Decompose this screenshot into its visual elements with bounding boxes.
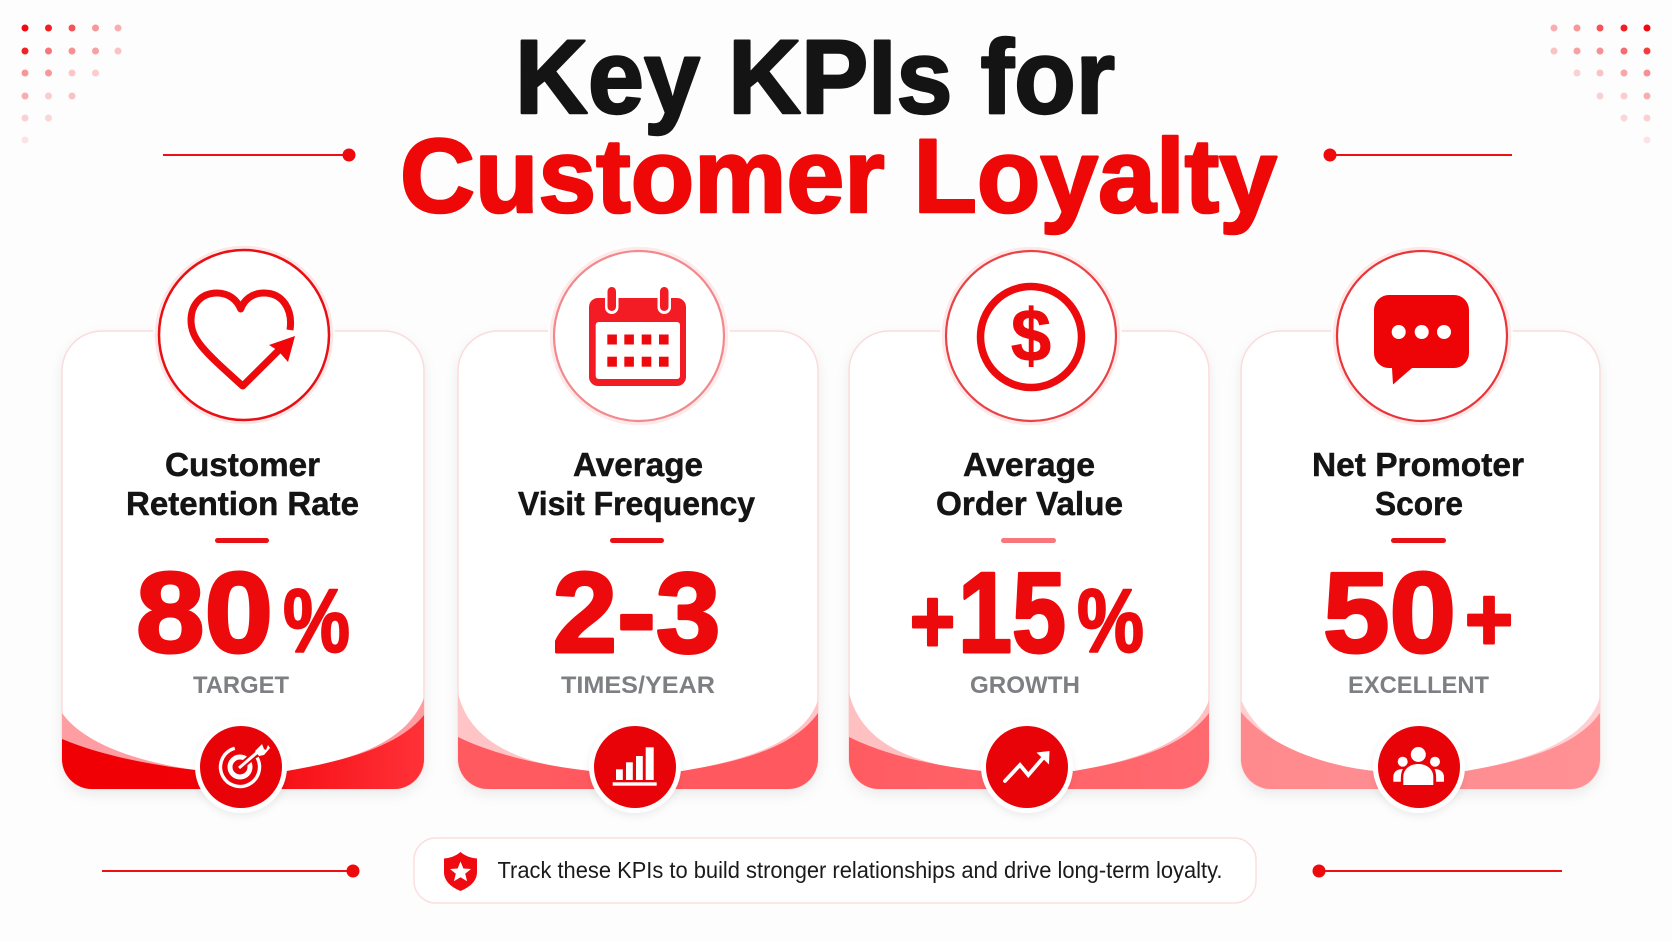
value: % (283, 572, 350, 672)
icon: target badge (195, 721, 287, 813)
value: + (1465, 570, 1513, 670)
message text: Track these KPIs to build stronger relationships and drive long-term loyalty. (498, 857, 1222, 883)
icon: shield with star (444, 852, 477, 891)
value: 50 (1323, 550, 1456, 677)
card title (126, 446, 359, 522)
icon: dollar coin (980, 286, 1082, 388)
bottom wave (458, 693, 818, 789)
bottom wave (1241, 697, 1600, 789)
value: % (1077, 572, 1144, 672)
icon: bar chart badge (589, 721, 681, 813)
bottom wave (849, 693, 1209, 789)
caption: GROWTH (970, 672, 1080, 699)
panel: net promoter score (1241, 245, 1600, 813)
card frame (1241, 331, 1600, 789)
divider (215, 538, 269, 543)
card title: Score (1375, 485, 1463, 522)
caption: TARGET (193, 672, 289, 699)
value: + (910, 572, 955, 672)
icon circle (1331, 245, 1513, 427)
title (400, 19, 1277, 235)
card title: Order Value (936, 485, 1123, 522)
callout box (414, 838, 1256, 903)
icon: dollar coin: $ (1011, 294, 1051, 377)
icon: heart with arrow (191, 293, 295, 386)
icon: people badge (1373, 721, 1465, 813)
decorative dots: top right (1550, 24, 1650, 144)
card frame (62, 331, 424, 789)
icon: chat bubble (1374, 295, 1469, 384)
card title (936, 446, 1123, 522)
card frame (849, 331, 1209, 789)
card title: Visit Frequency (518, 485, 756, 522)
icon circle (548, 245, 730, 427)
icon circle (940, 245, 1122, 427)
decorative dots: top left (22, 24, 122, 144)
card frame (458, 331, 818, 789)
footer accent line right (1312, 864, 1562, 878)
caption: TIMES/YEAR (561, 672, 715, 699)
card title: Net Promoter (1312, 446, 1524, 483)
divider (610, 538, 664, 543)
panel: customer retention rate (62, 244, 424, 813)
icon: trend arrow badge (981, 721, 1073, 813)
card title: Customer (165, 446, 320, 483)
title accent line left (163, 148, 356, 162)
value (910, 550, 1144, 677)
title: Key KPIs for (515, 19, 1115, 136)
value (1323, 550, 1513, 677)
value: 15 (958, 550, 1066, 677)
card title: Average (963, 446, 1095, 483)
value (136, 550, 350, 677)
caption: EXCELLENT (1348, 672, 1489, 699)
panel: average order value (849, 245, 1209, 813)
title: Customer Loyalty (400, 118, 1277, 235)
card title: Retention Rate (126, 485, 359, 522)
divider (1391, 538, 1446, 543)
icon circle (153, 244, 335, 426)
divider (1001, 538, 1056, 543)
card title (518, 446, 756, 522)
bottom wave (62, 698, 424, 789)
card title (1312, 446, 1524, 522)
panel: average visit frequency (458, 245, 818, 813)
value: 2-3 (552, 550, 720, 677)
callout: footer message (414, 838, 1256, 903)
value: 80 (136, 550, 273, 677)
title accent line right (1324, 148, 1512, 162)
icon: calendar (589, 285, 686, 386)
footer accent line left (102, 864, 360, 878)
card title: Average (573, 446, 703, 483)
